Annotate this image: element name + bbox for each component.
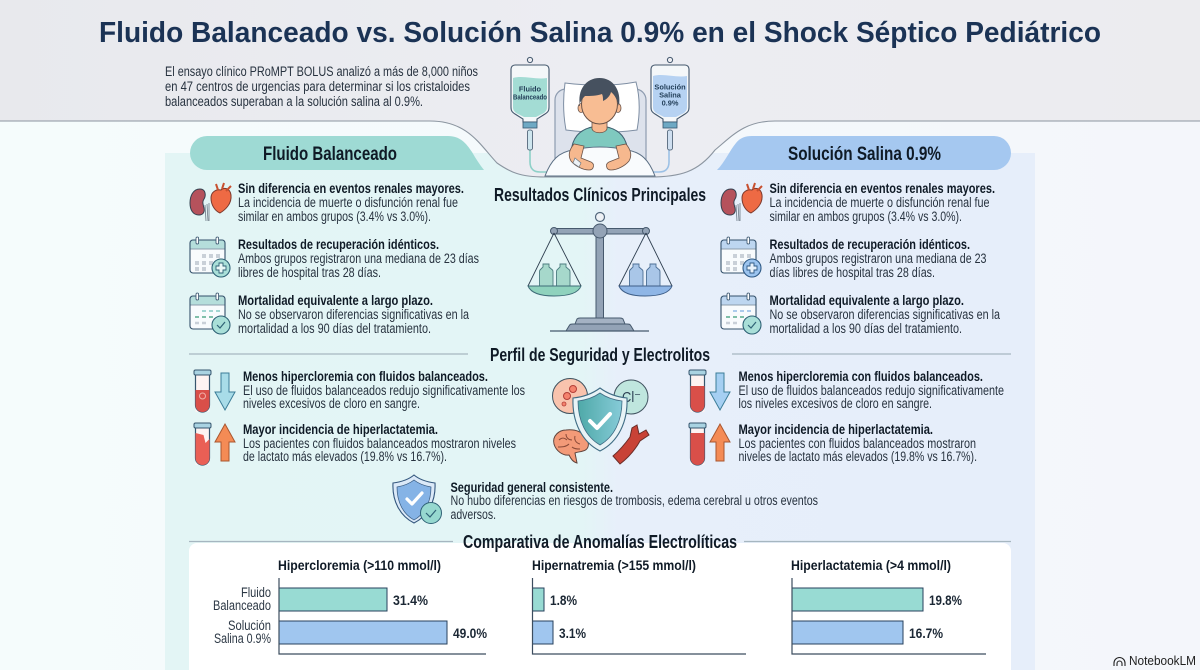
finding: recovery: Resultados de recuperación idénticos. bbox=[238, 237, 439, 252]
header band bbox=[0, 0, 1200, 177]
finding: renal events: La incidencia de muerte o disfunción renal fue bbox=[238, 195, 458, 210]
finding: renal events: similar en ambos grupos (3.4% vs 3.0%). bbox=[238, 209, 431, 224]
heading: electrolyte comparison: Comparativa de Anomalías Electrolíticas bbox=[463, 532, 737, 552]
safety: hypercloremia bbox=[738, 369, 1004, 411]
illustration: patient with IV bags bbox=[511, 57, 689, 176]
icon: tube with up arrow bbox=[194, 423, 235, 465]
chart: hipercloremia bbox=[213, 558, 487, 654]
heading: clinical results: Resultados Clínicos Principales bbox=[494, 185, 706, 205]
icon: tube with down arrow bbox=[689, 370, 730, 412]
panel: right safety bbox=[689, 369, 1004, 465]
safety: hypercloremia bbox=[243, 369, 525, 411]
chart: hiperlactatemia: 16.7% bbox=[909, 626, 943, 642]
finding: renal events: similar en ambos grupos (3.4% vs 3.0%). bbox=[770, 209, 962, 224]
safety: hypercloremia: los niveles excesivos de cloro en sangre. bbox=[738, 396, 932, 411]
safety: hyperlactatemia bbox=[738, 422, 977, 464]
icon: calendar plus bbox=[721, 237, 761, 277]
icon: bag right bbox=[651, 57, 689, 150]
icon: tube with down arrow bbox=[194, 370, 235, 412]
header pill: solucion salina bbox=[717, 136, 1011, 170]
safety: hypercloremia: El uso de fluidos balanceados redujo significativamente bbox=[738, 383, 1004, 398]
finding: recovery: Resultados de recuperación idénticos. bbox=[770, 237, 970, 252]
panel: left safety bbox=[194, 369, 525, 465]
icon: vessel bbox=[613, 425, 649, 464]
text: general safety: adversos. bbox=[450, 507, 496, 522]
central panel bbox=[165, 153, 1035, 670]
icon: bed frame bbox=[555, 89, 646, 175]
intro text: El ensayo clínico PRoMPT BOLUS analizó a más de 8,000 niños bbox=[165, 64, 478, 79]
icon: brain bbox=[554, 430, 588, 463]
finding: mortality: Mortalidad equivalente a largo plazo. bbox=[770, 293, 964, 308]
safety: hyperlactatemia: Los pacientes con fluidos balanceados mostraron bbox=[738, 436, 976, 451]
panel: right clinical results bbox=[721, 181, 1000, 336]
safety: hypercloremia: Menos hipercloremia con fluidos balanceados. bbox=[738, 369, 983, 384]
chart: hipercloremia: 49.0% bbox=[453, 626, 487, 642]
icon: general safety shield bbox=[393, 475, 442, 524]
icon: right tube bbox=[647, 150, 669, 172]
finding: recovery: días libres de hospital tras 28 días. bbox=[770, 265, 935, 280]
finding: renal events bbox=[770, 181, 995, 224]
icon: kidney and heart bbox=[721, 183, 762, 221]
icon: calendar plus bbox=[190, 237, 230, 277]
safety: hyperlactatemia: Mayor incidencia de hiperlactatemia. bbox=[738, 422, 933, 437]
safety: hypercloremia: El uso de fluidos balanceados redujo significativamente los bbox=[243, 383, 525, 398]
finding: recovery: libres de hospital tras 28 días. bbox=[238, 265, 381, 280]
safety: hypercloremia: niveles excesivos de cloro en sangre. bbox=[243, 396, 420, 411]
text: general safety: Seguridad general consistente. bbox=[450, 480, 613, 495]
finding: mortality: No se observaron diferencias significativas en la bbox=[770, 307, 1000, 322]
header pill: fluido balanceado bbox=[190, 136, 484, 170]
safety: hyperlactatemia: Los pacientes con fluidos balanceados mostraron niveles bbox=[243, 436, 516, 451]
intro text: balanceados superaban a la solución salina al 0.9%. bbox=[165, 94, 423, 109]
finding: mortality: mortalidad a los 90 días del tratamiento. bbox=[238, 321, 431, 336]
icon: bag left: Balanceado bbox=[513, 92, 547, 102]
chart: hiperlactatemia: Hiperlactatemia (>4 mmol/l) bbox=[791, 558, 951, 574]
finding: renal events: Sin diferencia en eventos renales mayores. bbox=[770, 181, 995, 196]
title: Fluido Balanceado vs. Solución Salina 0.9% en el Shock Séptico Pediátrico bbox=[99, 17, 1101, 49]
finding: renal events: Sin diferencia en eventos renales mayores. bbox=[238, 181, 464, 196]
icon: central shield with bacteria, chloride, brain and vessel bbox=[552, 378, 649, 464]
category labels: Salina 0.9% bbox=[214, 631, 271, 646]
icon: bag right: Salina bbox=[659, 90, 682, 100]
header pill: solucion salina: Solución Salina 0.9% bbox=[788, 144, 941, 165]
chart: hipercloremia: Hipercloremia (>110 mmol/l) bbox=[278, 558, 441, 574]
icon: bacteria bbox=[552, 378, 588, 414]
icon: kidney and heart bbox=[190, 183, 231, 221]
icon: bag left bbox=[511, 57, 549, 150]
chart: hipernatremia: Hipernatremia (>155 mmol/l) bbox=[532, 558, 696, 574]
chart: hipernatremia: 3.1% bbox=[559, 626, 586, 642]
chart card bbox=[189, 543, 1011, 670]
icon: pillow bbox=[564, 82, 639, 132]
safety: hyperlactatemia bbox=[243, 422, 516, 464]
icon: calendar check bbox=[721, 293, 761, 334]
icon: chloride: Cl⁻ bbox=[622, 389, 641, 406]
chart: hiperlactatemia bbox=[791, 558, 986, 654]
heading: safety profile: Perfil de Seguridad y Electrolitos bbox=[490, 345, 710, 365]
icon: bag right: 0.9% bbox=[662, 98, 679, 108]
notebooklm logo: NotebookLM bbox=[1129, 654, 1196, 668]
icon: bag left: Fluido bbox=[519, 84, 542, 94]
finding: mortality: mortalidad a los 90 días del tratamiento. bbox=[770, 321, 962, 336]
finding: recovery bbox=[770, 237, 986, 280]
finding: mortality: No se observaron diferencias significativas en la bbox=[238, 307, 469, 322]
finding: mortality: Mortalidad equivalente a largo plazo. bbox=[238, 293, 433, 308]
icon: balance scale bbox=[528, 212, 672, 331]
category labels: Solución bbox=[228, 618, 271, 633]
text: general safety: No hubo diferencias en riesgos de trombosis, edema cerebral u otros eventos bbox=[450, 493, 818, 508]
category labels: Fluido bbox=[241, 585, 271, 600]
finding: recovery bbox=[238, 237, 479, 280]
finding: mortality bbox=[238, 293, 469, 336]
icon: shield bbox=[573, 388, 627, 451]
chart: hipernatremia: 1.8% bbox=[550, 593, 577, 609]
finding: renal events bbox=[238, 181, 464, 224]
safety: hyperlactatemia: niveles de lactato más elevados (19.8% vs 16.7%). bbox=[738, 449, 977, 464]
chart: hipernatremia bbox=[532, 558, 746, 654]
intro text: en 47 centros de urgencias para determinar si los cristaloides bbox=[165, 79, 470, 94]
finding: recovery: Ambos grupos registraron una mediana de 23 bbox=[770, 251, 986, 266]
intro text bbox=[165, 64, 478, 109]
finding: renal events: La incidencia de muerte o disfunción renal fue bbox=[770, 195, 990, 210]
text: general safety bbox=[450, 480, 818, 522]
icon: patient bbox=[545, 78, 655, 176]
safety: hyperlactatemia: Mayor incidencia de hiperlactatemia. bbox=[243, 422, 438, 437]
finding: recovery: Ambos grupos registraron una mediana de 23 días bbox=[238, 251, 479, 266]
icon: bag right: Solución bbox=[654, 82, 686, 92]
safety: hypercloremia: Menos hipercloremia con fluidos balanceados. bbox=[243, 369, 488, 384]
header pill: fluido balanceado: Fluido Balanceado bbox=[263, 144, 397, 165]
finding: mortality bbox=[770, 293, 1000, 336]
icon: left tube bbox=[530, 150, 552, 172]
chart: hipercloremia: 31.4% bbox=[393, 593, 428, 609]
category labels: Balanceado bbox=[213, 598, 271, 613]
icon: tube with up arrow bbox=[689, 423, 730, 465]
safety: hyperlactatemia: de lactato más elevados (19.8% vs 16.7%). bbox=[243, 449, 447, 464]
icon: calendar check bbox=[190, 293, 230, 334]
category labels bbox=[213, 585, 271, 646]
chart: hiperlactatemia: 19.8% bbox=[929, 593, 962, 609]
panel: left clinical results bbox=[190, 181, 479, 336]
